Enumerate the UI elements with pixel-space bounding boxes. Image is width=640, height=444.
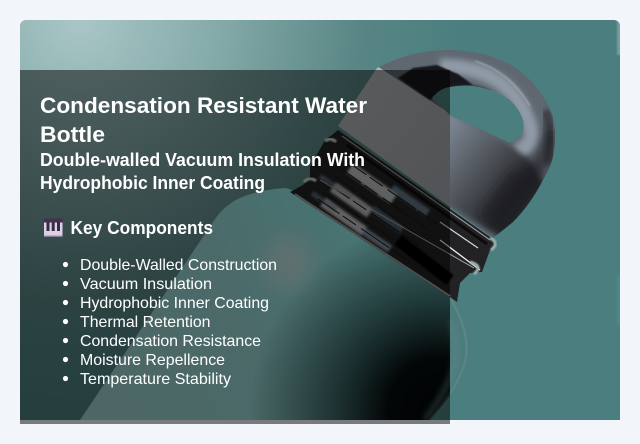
bottle body [80, 188, 468, 420]
carry loop band [440, 66, 532, 152]
title: Condensation Resistant Water [40, 93, 367, 118]
bottle cap with carry loop [338, 50, 556, 238]
list: key components: Condensation Resistance [80, 333, 261, 350]
subtitle: Hydrophobic Inner Coating [40, 173, 265, 193]
subtitle [40, 150, 365, 193]
cap front face right part [450, 115, 544, 238]
loop inner shadow [398, 65, 473, 100]
cap lower shade [480, 130, 557, 232]
subtitle: Double-walled Vacuum Insulation With [40, 150, 365, 170]
list: key components: Hydrophobic Inner Coating [80, 295, 269, 312]
heading: key components: Key Components [70, 218, 213, 238]
bottle neck threads [290, 130, 497, 302]
list: key components: Vacuum Insulation [80, 276, 212, 293]
icon: piano keys [44, 218, 62, 237]
title [40, 93, 367, 147]
list: key components [63, 257, 277, 388]
list: key components: Double-Walled Construction [80, 257, 277, 274]
translucent text panel [20, 70, 450, 424]
title: Bottle [40, 122, 105, 147]
list: key components: Thermal Retention [80, 314, 210, 331]
cap front face left part [338, 67, 450, 207]
list: key components: Temperature Stability [80, 371, 231, 388]
list: key components: Moisture Repellence [80, 352, 225, 369]
